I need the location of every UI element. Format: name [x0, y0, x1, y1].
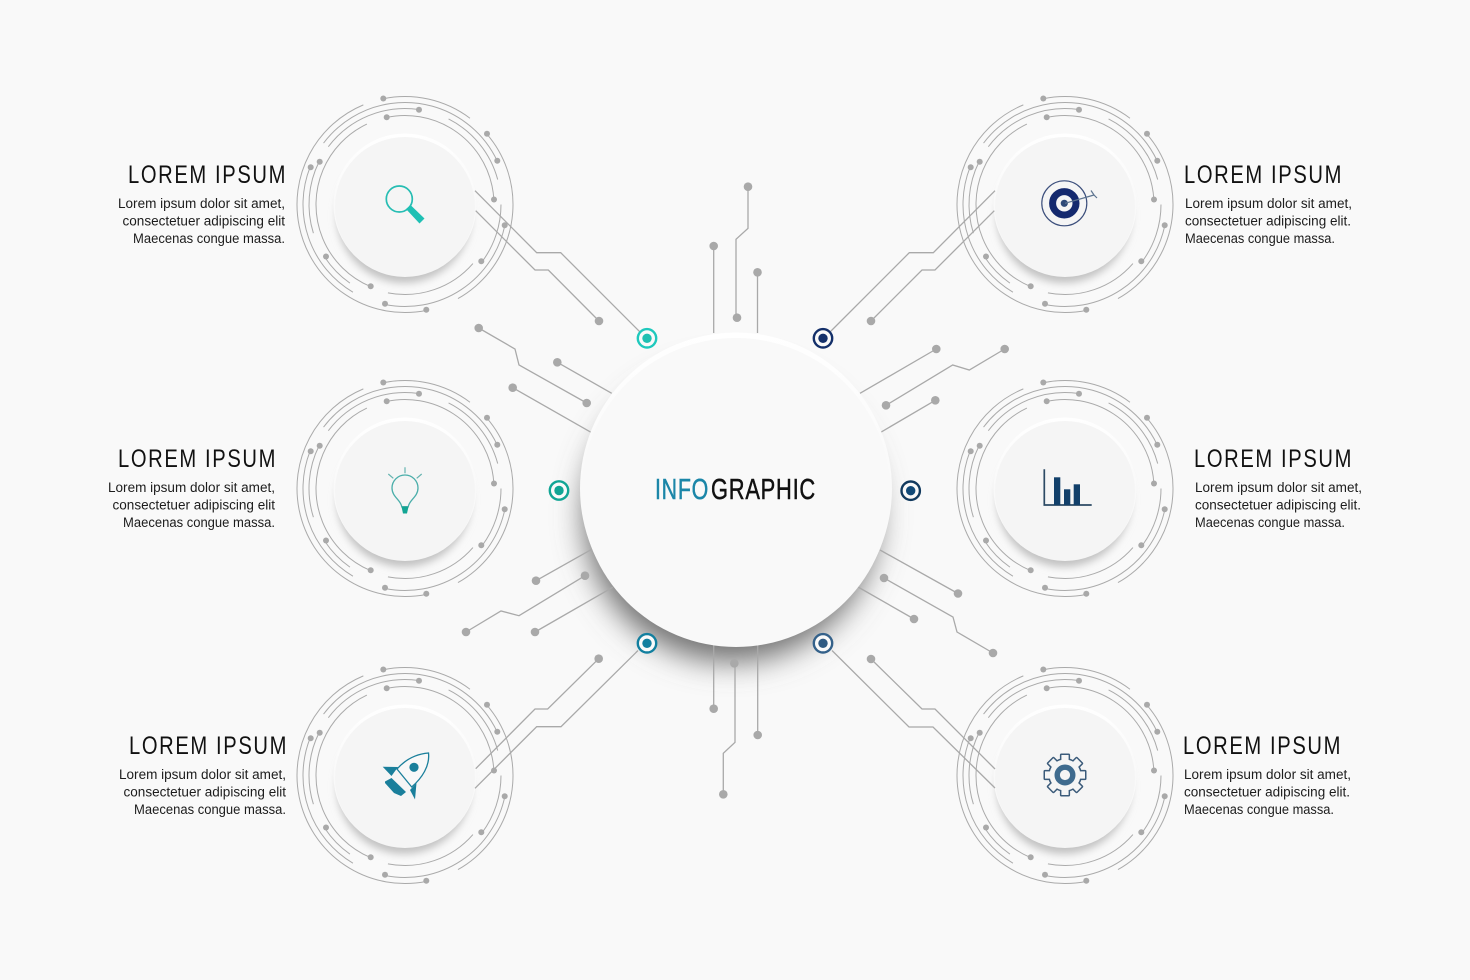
marker: bottom right — [814, 634, 832, 652]
text block: top left: consectetuer adipiscing elit — [122, 214, 285, 228]
text block: bottom left: Maecenas congue massa. — [134, 802, 286, 817]
disc: middle right — [994, 418, 1136, 567]
text block: middle left: LOREM IPSUM — [118, 445, 277, 473]
circuit ring: middle right — [913, 336, 1217, 641]
circuit ring: bottom right — [913, 623, 1217, 928]
circuit lines: upper left — [474, 324, 612, 432]
circuit lines: top left — [475, 191, 640, 332]
text block: bottom left: Lorem ipsum dolor sit amet, — [119, 767, 286, 782]
disc: top left — [334, 134, 476, 283]
text block: top right: Lorem ipsum dolor sit amet, — [1185, 196, 1352, 211]
center circle shadow — [584, 368, 878, 662]
text block: middle right: Lorem ipsum dolor sit amet, — [1195, 480, 1362, 495]
text block: middle right: LOREM IPSUM — [1194, 445, 1353, 473]
marker: middle left — [550, 481, 568, 500]
icon: rocket — [383, 753, 429, 800]
icon: bar chart — [1044, 469, 1092, 505]
center title: INFO — [655, 474, 709, 506]
text block: bottom left: LOREM IPSUM — [129, 732, 288, 760]
text block: top left: LOREM IPSUM — [128, 161, 287, 189]
circuit lines: bottom left — [475, 650, 638, 788]
circuit lines: lower left — [462, 549, 613, 636]
text block: bottom left — [119, 732, 288, 817]
text block: middle right: consectetuer adipiscing elit. — [1195, 498, 1361, 512]
text block: middle right: Maecenas congue massa. — [1195, 515, 1345, 530]
circuit lines: bottom right — [832, 650, 995, 788]
text block: bottom left: consectetuer adipiscing elit — [124, 784, 286, 800]
text block: middle right — [1194, 445, 1362, 530]
center circle — [580, 332, 892, 647]
text block: top right: LOREM IPSUM — [1184, 161, 1343, 189]
text block: middle left: Maecenas congue massa. — [123, 515, 275, 530]
marker: bottom left — [638, 634, 656, 652]
text block: bottom right — [1183, 732, 1351, 817]
text block: top left: Maecenas congue massa. — [133, 231, 285, 246]
text block: middle left — [108, 445, 277, 530]
circuit lines: bottom center — [709, 645, 762, 799]
disc: bottom left — [334, 704, 476, 854]
text block: bottom right: LOREM IPSUM — [1183, 732, 1342, 760]
icon: gear — [1045, 755, 1085, 795]
center title: GRAPHIC — [711, 474, 816, 506]
marker: top right — [814, 329, 832, 347]
circuit ring: top left — [253, 52, 557, 357]
text block: middle left: Lorem ipsum dolor sit amet, — [108, 480, 275, 495]
icon: light bulb — [388, 467, 422, 514]
circuit ring: top right — [913, 52, 1217, 357]
circuit lines: top center — [709, 182, 762, 333]
circuit lines: upper right — [860, 345, 1009, 432]
text block: top left: Lorem ipsum dolor sit amet, — [118, 196, 285, 211]
text block: top right — [1184, 161, 1352, 246]
circuit lines: lower right — [858, 550, 997, 657]
text block: top right: consectetuer adipiscing elit. — [1185, 214, 1351, 228]
text block: top left — [118, 161, 287, 246]
circuit ring: bottom left — [253, 623, 557, 928]
text block: bottom right: Lorem ipsum dolor sit amet, — [1184, 767, 1351, 782]
icon: target — [1042, 181, 1097, 226]
disc: top right — [994, 134, 1136, 283]
text block: middle left: consectetuer adipiscing elit — [112, 498, 275, 512]
text block: bottom right: consectetuer adipiscing elit. — [1184, 784, 1350, 800]
circuit ring: middle left — [253, 336, 557, 641]
text block: bottom right: Maecenas congue massa. — [1184, 802, 1334, 817]
center title — [655, 474, 816, 506]
icon: magnifier — [386, 186, 424, 224]
disc: bottom right — [994, 704, 1136, 854]
marker: top left — [638, 329, 656, 347]
text block: top right: Maecenas congue massa. — [1185, 231, 1335, 246]
marker: middle right — [902, 482, 920, 500]
circuit lines: top right — [830, 191, 995, 332]
disc: middle left — [334, 418, 476, 567]
